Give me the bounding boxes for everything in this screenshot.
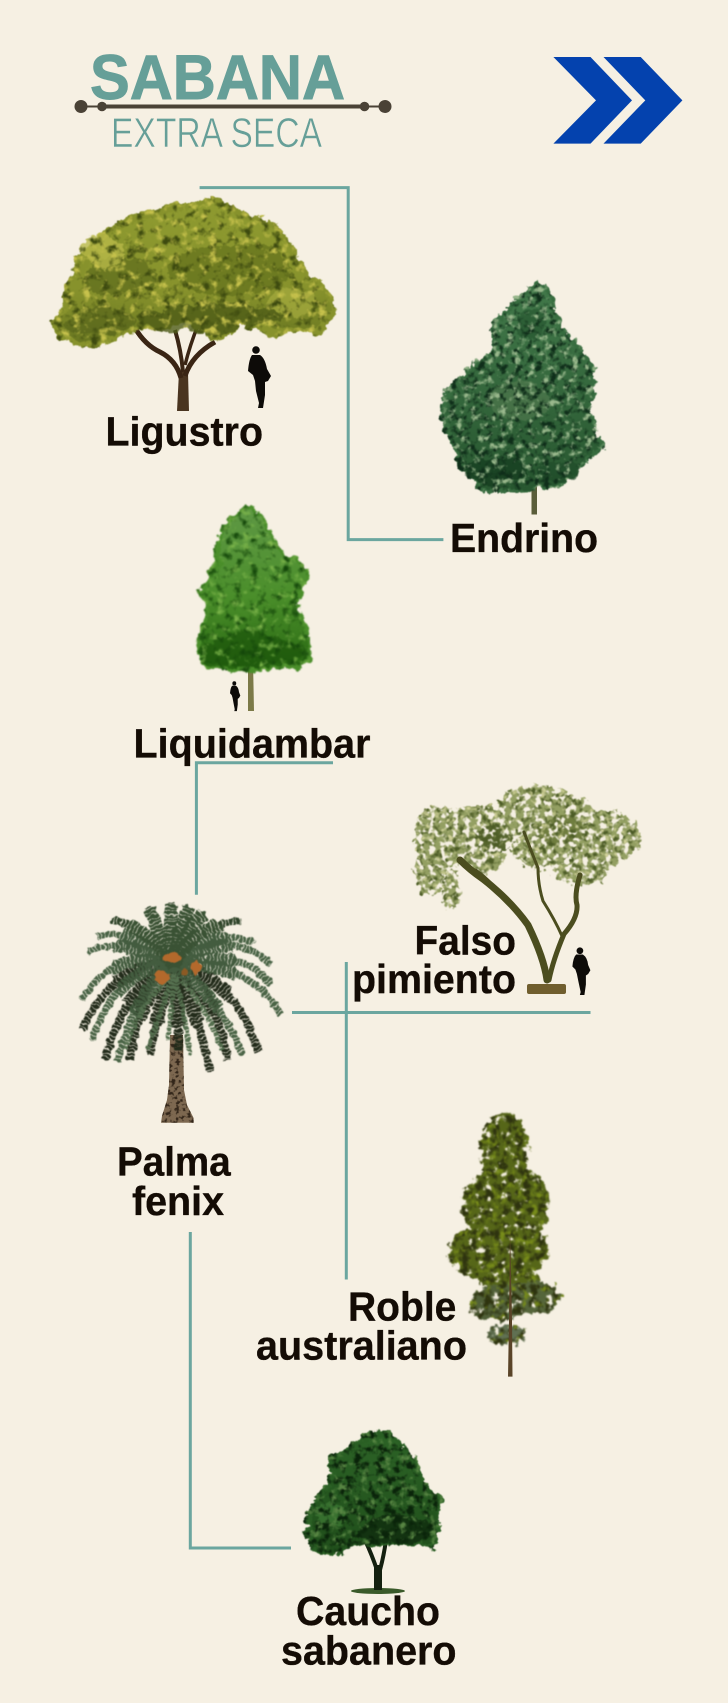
trunk	[532, 485, 537, 514]
label: Palma fenix: Palma	[117, 1138, 232, 1184]
trunk	[161, 1035, 194, 1123]
label: Falso pimiento	[352, 917, 516, 1002]
planter base	[527, 984, 566, 994]
person silhouette	[572, 947, 590, 995]
label: Palma fenix: fenix	[132, 1178, 224, 1224]
label: Liquidambar: Liquidambar	[134, 721, 371, 767]
label: Roble australiano	[256, 1283, 467, 1368]
label: Falso pimiento: pimiento	[352, 956, 516, 1002]
subheading: EXTRA SECA: EXTRA SECA	[111, 109, 322, 156]
label: Roble australiano: australiano	[256, 1322, 467, 1368]
connector: Ligustro to Endrino	[200, 188, 443, 540]
title divider with dots	[74, 100, 392, 113]
label: Ligustro: Ligustro	[106, 408, 263, 454]
heading: SABANA: SABANA	[90, 43, 345, 113]
connector: Palma fenix to Caucho sabanero	[190, 1232, 291, 1548]
trunk and branches	[365, 1540, 386, 1590]
trunk	[508, 1230, 512, 1377]
ground shadow	[351, 1588, 405, 1594]
label: Caucho sabanero: sabanero	[281, 1628, 456, 1674]
connector: Falso pimiento to Roble australiano	[345, 962, 348, 1280]
tree: Endrino	[445, 282, 602, 514]
tree: Palma fenix	[82, 902, 281, 1123]
foliage	[197, 507, 310, 670]
tree: Liquidambar	[197, 507, 310, 711]
person silhouette	[230, 681, 240, 711]
foliage	[58, 204, 334, 345]
date clusters	[154, 953, 201, 984]
connector: Palma fenix to Falso pimiento	[292, 1011, 590, 1014]
label: Endrino: Endrino	[450, 515, 598, 561]
tree: Caucho sabanero	[303, 1434, 441, 1594]
label: Caucho sabanero: Caucho	[296, 1588, 440, 1634]
foliage	[448, 1114, 562, 1344]
connector: Liquidambar to Palma fenix	[196, 763, 333, 895]
tree: Falso pimiento	[411, 786, 642, 995]
foliage	[445, 282, 602, 492]
trunk	[248, 660, 254, 711]
label: Palma fenix	[117, 1138, 232, 1224]
tree: Roble australiano	[448, 1114, 562, 1377]
label: Falso pimiento: Falso	[414, 917, 516, 963]
foliage	[411, 786, 642, 912]
fronds	[82, 902, 281, 1072]
tree: Ligustro	[58, 204, 334, 411]
person silhouette	[248, 346, 271, 408]
foliage	[303, 1434, 441, 1556]
trunk and branches	[460, 832, 580, 980]
trunk and branches	[135, 325, 215, 411]
label: Caucho sabanero	[281, 1588, 456, 1674]
icon: double chevron arrow	[553, 57, 682, 144]
label: Roble australiano: Roble	[348, 1283, 456, 1329]
title	[74, 43, 392, 156]
